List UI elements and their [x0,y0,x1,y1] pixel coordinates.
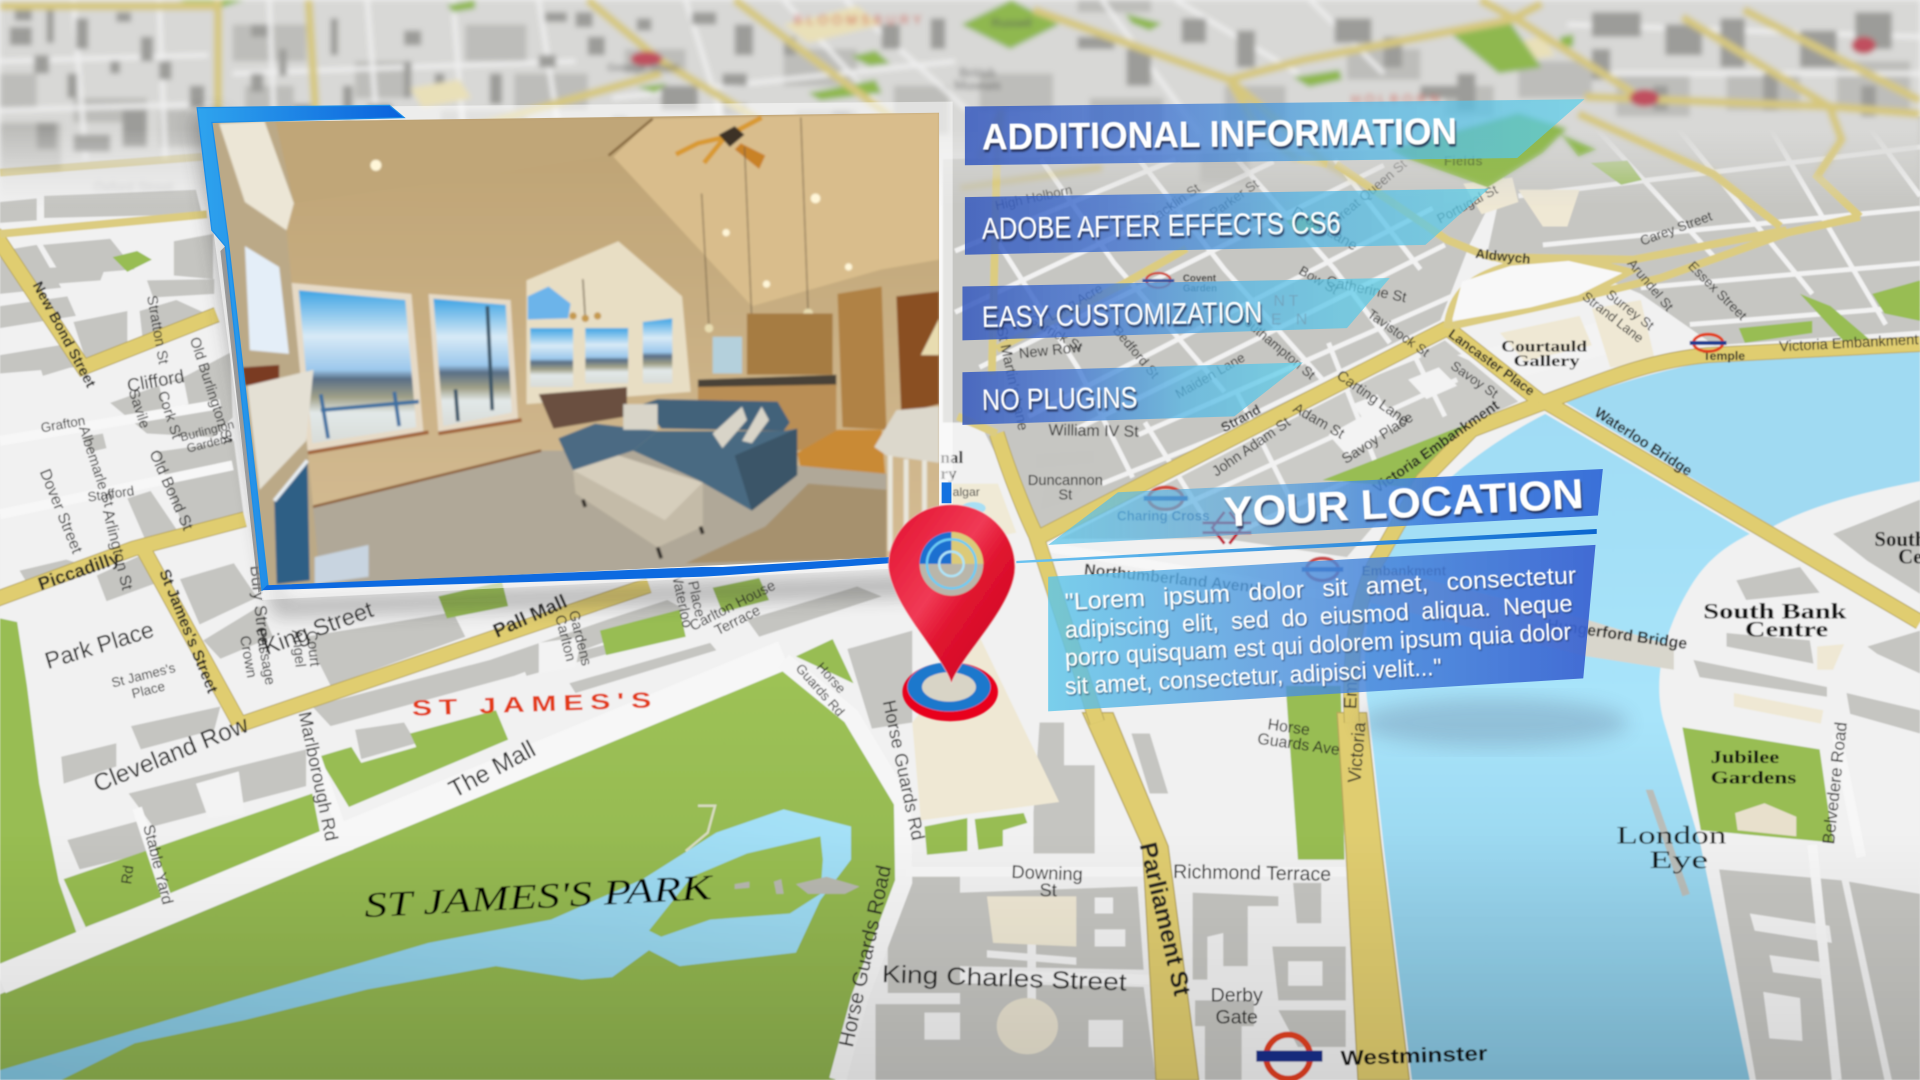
labels left: Dover Street [36,467,85,556]
labels left: St James's Street [155,567,221,696]
labels center: Fields [1444,153,1483,168]
alcove windows [530,328,573,387]
labels center: Victoria Embankment [1370,398,1503,497]
far roads [0,0,1920,198]
labels center: Southampton St [1235,309,1318,382]
river thames [1365,414,1750,1080]
kitchen cabinets [747,313,833,375]
labels center: High Holborn [994,182,1074,213]
labels center: Aldwych [1475,246,1531,267]
labels left: Old Burlington St [186,335,236,446]
labels left: Old Bond St [145,448,196,534]
labels left: Passage [252,627,278,686]
labels center: Macklin St [1143,180,1203,228]
labels center: Savoy St [1448,358,1501,401]
fountain [961,502,986,514]
labels center: William IV St [1048,422,1139,441]
labels center: Tavistock St [1365,306,1432,360]
labels left: Crown [236,635,259,679]
icon: embankment roundel [1302,558,1343,580]
labels center: Gallery [1513,353,1580,370]
pin base blue ring [907,662,991,711]
labels center: Portugal St [1434,182,1500,226]
labels bottom center: Victoria [1343,720,1370,784]
wall [208,110,943,590]
labels center: Carting Lane [1333,368,1412,429]
icon: national rail symbol [1202,512,1251,544]
ottoman legs [583,500,703,558]
banner: no plugins [962,362,1303,425]
labels left: Carlton House [687,578,778,635]
south strand grey zone [1060,340,1518,557]
labels left: Park Place [42,616,157,674]
labels left: Horse [814,659,849,696]
labels center: St [1058,488,1072,504]
river thames east [1566,350,1920,527]
far labels: Goodge Street [607,62,679,74]
lamp [921,318,939,355]
labels left: Gardens [185,431,234,456]
labels south bank [1546,332,1920,874]
labels bottom center: King Charles Street [881,961,1127,997]
island pavilion [735,877,860,894]
far pale blocks [0,0,1910,184]
white side streets [0,404,1861,1080]
labels bottom center: St [1039,879,1057,900]
icon: location pin [888,504,1015,721]
labels south bank: London [1616,821,1727,850]
labels south bank: Hungerford Bridge [1546,616,1688,653]
sofa chaise [558,424,658,470]
street grid [955,110,1920,533]
labels bottom center: Richmond Terrace [1173,861,1331,886]
frame grey bevel [220,246,262,593]
labels left: Waterloo [667,569,695,629]
far labels: Russell [991,16,1031,30]
labels left: Gardens [565,609,594,667]
lake island [649,836,823,937]
labels left: Clifford [125,365,186,396]
labels left: King Street [260,596,377,660]
secondary roads [0,107,1860,433]
label: st james's park: ST JAMES'S PARK [363,867,716,925]
banner: additional information: ADDITIONAL INFORMATION [982,111,1457,157]
far dark blocks [10,6,1892,159]
far map: defocused top band [0,0,1920,200]
labels left: Stafford [87,483,135,505]
labels left: Guards Rd [793,661,847,719]
labels center: Parker St [1207,176,1262,221]
the mall [0,655,784,980]
table legs [890,456,924,551]
labels left: Place [684,580,707,619]
labels center [940,153,1750,598]
sofa back [643,399,790,431]
garden circle [997,998,1058,1054]
alcove [527,241,691,404]
ceiling fan [676,118,765,169]
pin window [920,532,983,596]
labels left: Place [130,679,166,701]
labels center: Garrick St [1026,311,1085,354]
far labels: BLOOMSBURY [794,12,925,27]
labels center: nal [940,448,963,467]
labels left [29,279,929,1049]
labels center: Temple [1703,349,1745,363]
window sills [306,420,522,453]
blue frame: bottom [262,557,889,590]
panel: lorem ipsum text: adipiscing elit, sed do eiusmod aliqua. Neque [1064,590,1573,644]
balcony post [456,306,492,421]
labels center: Northumberland Avenue [1083,562,1269,598]
labels center: Bedford St [1110,323,1162,382]
labels south bank: Eye [1649,845,1708,874]
blue frame: right tab [942,482,951,503]
labels center: Carey Street [1638,208,1714,248]
labels left: Burlington [179,417,236,444]
panel: lorem ipsum text: porro quisquam est qui dolorem ipsum quia dolor [1064,619,1572,672]
labels center: Strand [1218,402,1263,435]
blue frame: top and left [197,105,404,590]
labels bottom center: Downing [1011,861,1083,884]
central west end grey zone [943,147,1518,534]
banner: adobe after effects: ADOBE AFTER EFFECTS CS6 [982,206,1341,246]
hungerford bridge [1369,566,1674,670]
dining set [539,387,627,429]
pin base center [922,672,976,702]
mantel [242,365,279,386]
pillows [623,404,769,448]
white table [874,407,939,463]
labels left: Albemarle St [75,424,116,509]
labels center: algar [953,485,980,499]
white notches in blocks [159,321,1832,1047]
labels center: ry [940,464,957,483]
lake: st james's park [0,809,851,1080]
icon: temple roundel [1690,334,1727,351]
labels left: Piccadilly [35,547,123,594]
labels left: Savile [125,387,152,430]
carpet rug right [686,484,887,563]
chandelier [569,279,601,322]
labels center: Great Queen St [1328,156,1410,229]
labels south bank: Belvedere Road [1818,721,1851,845]
fireplace stone [247,370,313,490]
frame drop shadow [193,113,943,615]
pin body [888,504,1015,683]
panel: your location [1048,469,1603,545]
window two [429,294,518,432]
banner: no plugins: NO PLUGINS [982,381,1138,417]
labels center: Bow St [1296,263,1341,297]
window one [291,283,424,452]
labels south bank: Waterloo Bridge [1591,405,1695,480]
beige plots [367,178,1844,947]
left window [245,246,289,354]
labels left: Cork St [154,389,184,441]
far labels: HOLBORN [1351,92,1443,107]
labels left: Horse Guards Rd [879,698,929,842]
labels left: Marlborough Rd [295,710,343,843]
labels center: Embankment [1362,564,1447,579]
labels south bank: South Bank [1703,598,1847,623]
yellow road fills [0,233,1920,725]
pin base red [902,662,998,721]
labels left: Angel [288,629,308,668]
panel: lorem ipsum text: "Lorem ipsum dolor sit amet, consectetur [1064,562,1577,616]
panel: lorem ipsum text: sit amet, consectetur, adipisci velit..." [1064,654,1442,700]
pendant lamps [705,309,813,332]
vaulted ceiling [613,113,939,306]
tv edge [274,460,307,501]
baseboard [312,451,541,507]
light wedge [315,545,369,584]
labels bottom center: Guards Ave [1256,731,1341,759]
labels center: New Row [1018,340,1083,362]
labels south bank: Gardens [1711,768,1796,788]
icon: westminster roundel [1256,1035,1322,1079]
labels center: Drury Lane [1289,204,1360,254]
labels center: Lancaster Place [1446,326,1538,399]
banner: easy customization: EASY CUSTOMIZATION [982,296,1263,334]
labels center: Covent [1183,274,1217,285]
gable window [528,287,571,320]
labels left: Stable Yard [139,823,176,906]
labels left: Grafton [39,413,86,435]
labels center: Essex Street [1685,258,1750,323]
labels bottom center: Parliament St [1134,840,1195,998]
labels left: Horse Guards Road [835,863,896,1049]
labels center: Maiden Lane [1173,350,1247,402]
labels center: Charing Cross [1117,508,1210,523]
labels bottom center: Derby [1211,985,1263,1007]
labels center: Adam St [1290,400,1347,442]
panel: lorem ipsum text [1048,545,1596,711]
labels left: St James's [110,660,177,690]
far beige [410,6,1555,108]
labels south bank: Jubilee [1711,747,1779,767]
sofa arm [735,429,797,511]
far labels: Museum [954,77,1001,92]
icon: covent garden roundel [1142,273,1174,288]
photo: living room [208,110,943,590]
label: st james's district: ST JAMES'S [411,687,658,721]
banner: adobe after effects [965,189,1489,255]
labels left: Carlton [551,613,578,663]
labels left: Terrace [712,603,763,639]
labels left: The Mall [445,736,540,804]
labels left: Cleveland Row [90,711,253,798]
labels bottom center: Gate [1216,1007,1258,1029]
labels left: Stratton St [143,294,171,365]
labels center: NT [1273,293,1302,310]
labels south bank: Centre [1745,617,1828,642]
labels bottom center [881,681,1488,1070]
photo panel [193,102,953,615]
ottoman [573,456,703,520]
labels center: Surrey St [1603,287,1657,333]
labels center: Strand Lane [1579,289,1646,346]
far labels: Oxford Street [93,180,174,195]
panel: your location: YOUR LOCATION [1223,470,1584,536]
banner: easy customization [962,278,1390,340]
labels left: Bury Street [246,564,275,652]
carpet [312,451,887,588]
location shadow [1359,698,1629,747]
left wall column [212,121,321,588]
far labels [606,12,1442,102]
icon: charing cross roundel [1144,487,1188,509]
london eye pier [1646,790,1690,896]
beam [609,119,653,156]
far labels: British [959,65,996,80]
far parks [178,0,1597,187]
trafalgar square [943,484,1016,545]
labels center: Garden [1183,283,1217,294]
labels bottom center: Horse [1267,716,1311,739]
sofa seat [633,429,797,511]
labels center: Duncannon [1028,473,1103,489]
banner: additional information [965,99,1584,165]
road casing [0,233,1920,725]
wood pillar [838,287,887,430]
door [896,291,939,414]
wood floor [797,430,887,490]
far street lines [0,0,1920,159]
labels center: Long Acre [1045,281,1105,324]
labels left: New Bond Street [29,279,98,391]
left molding [219,121,294,230]
flat ceiling [269,119,653,203]
labels center: Catherine St [1325,274,1408,306]
north east grey zone [1488,110,1920,345]
kitchen window [713,337,742,373]
labels left: Pall Mall [490,591,570,643]
recessed lights [370,160,852,288]
labels center: Arundel St [1624,256,1676,314]
labels left: Arlington St [99,508,135,592]
base cabinet [698,384,836,451]
labels center: E N [1271,311,1312,328]
labels left: Court [303,630,322,667]
labels center: Savoy Place [1339,410,1416,468]
labels bottom center: Westminster [1340,1042,1488,1070]
connector line [1016,529,1597,563]
road horse guards [784,661,904,1080]
pendant cords [702,118,808,327]
counter top [698,375,836,389]
far tube stations [631,37,1876,107]
frame glass edge [197,102,953,600]
aldwych crescent [1452,261,1622,320]
labels bottom center: Em [1339,681,1361,709]
park path [686,806,715,851]
labels left: Rd [119,865,138,885]
vignette [0,833,1920,1080]
labels center: John Adam St [1210,415,1294,480]
labels south bank: Victoria Embankment [1779,332,1919,355]
tv [274,460,310,584]
major roads [1082,713,1409,1080]
labels center: St Martin's Lane [993,325,1030,432]
railings [321,392,419,438]
labels center: Courtauld [1501,338,1587,355]
